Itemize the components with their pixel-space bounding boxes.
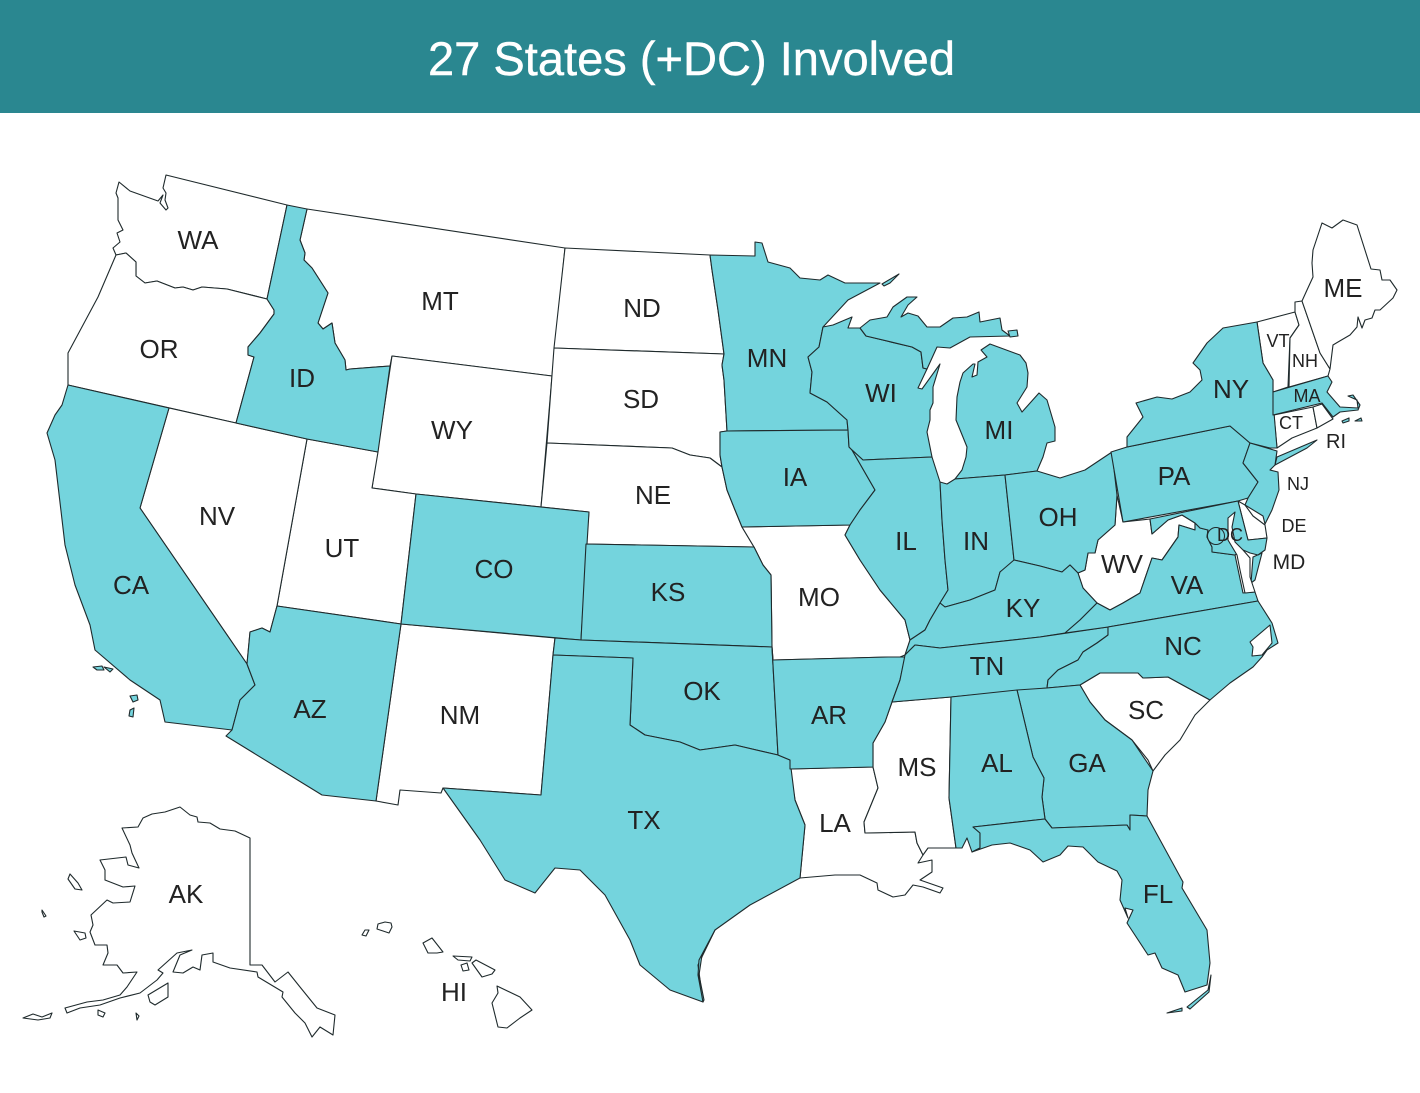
label LA: LA	[819, 808, 852, 838]
map: teal involved states	[47, 205, 1362, 1013]
label AR: AR	[811, 700, 847, 730]
label OK: OK	[683, 676, 721, 706]
label NV: NV	[199, 501, 236, 531]
state: Rhode Island	[1313, 404, 1333, 428]
label AZ: AZ	[293, 694, 327, 724]
state: Hawaii	[362, 922, 532, 1028]
state: Alabama	[949, 690, 1045, 852]
label WI: WI	[865, 378, 897, 408]
Pamlico Sound	[1250, 625, 1272, 656]
label NH: NH	[1292, 351, 1318, 371]
header banner	[0, 0, 1420, 113]
label NE: NE	[635, 480, 671, 510]
state: North Dakota	[554, 248, 724, 354]
label NM: NM	[440, 700, 480, 730]
label UT: UT	[325, 533, 359, 563]
state: Massachusetts	[1273, 376, 1360, 417]
map: white states	[23, 175, 1397, 1037]
state: Nevada	[140, 408, 307, 664]
label IA: IA	[783, 462, 808, 492]
state: Utah	[277, 439, 416, 624]
label ND: ND	[623, 293, 661, 323]
state: Mississippi	[864, 697, 956, 855]
state: Tennessee	[892, 627, 1108, 702]
label SC: SC	[1128, 695, 1164, 725]
California islands	[93, 666, 138, 717]
Massachusetts islands	[1342, 418, 1362, 423]
state: Maryland	[1150, 501, 1267, 555]
label ID: ID	[289, 363, 315, 393]
state: Kentucky	[905, 560, 1097, 655]
state: Maine	[1302, 220, 1397, 369]
label FL: FL	[1143, 879, 1173, 909]
state: Indiana	[940, 475, 1014, 607]
label MT: MT	[421, 286, 459, 316]
label GA: GA	[1068, 748, 1106, 778]
state: Ohio	[1005, 452, 1117, 573]
state: Colorado	[401, 494, 589, 640]
state: Nebraska	[541, 443, 754, 547]
Chesapeake Bay	[1228, 512, 1255, 593]
state: Oregon	[68, 253, 274, 423]
label KS: KS	[651, 577, 685, 607]
state: Georgia	[1017, 685, 1153, 830]
label NC: NC	[1164, 631, 1202, 661]
label MO: MO	[798, 582, 840, 612]
label DC: DC	[1217, 525, 1243, 545]
label PA: PA	[1158, 461, 1191, 491]
label RI: RI	[1326, 431, 1346, 453]
label IL: IL	[895, 526, 917, 556]
state: Texas	[443, 655, 805, 1002]
label AK: AK	[169, 879, 204, 909]
label OH: OH	[1038, 502, 1078, 532]
state: Iowa	[720, 430, 875, 527]
label MD: MD	[1273, 551, 1305, 574]
label DE: DE	[1281, 516, 1307, 536]
state: Florida	[972, 815, 1210, 992]
label MS: MS	[898, 752, 936, 782]
label NJ: NJ	[1287, 474, 1309, 494]
label WY: WY	[431, 415, 473, 445]
state: Wisconsin	[808, 317, 940, 460]
state: North Carolina	[1047, 601, 1278, 700]
Padre Island	[698, 930, 715, 1002]
state: Oklahoma	[553, 638, 778, 755]
label HI: HI	[441, 977, 467, 1007]
label IN: IN	[963, 526, 989, 556]
state: Connecticut	[1274, 407, 1317, 448]
state: Louisiana	[790, 767, 943, 897]
state: Minnesota	[710, 242, 880, 431]
label WA: WA	[178, 225, 219, 255]
label VA: VA	[1171, 570, 1204, 600]
label CA: CA	[113, 570, 150, 600]
label CT: CT	[1279, 413, 1303, 433]
label CO: CO	[474, 554, 514, 584]
Isle Royale	[882, 274, 899, 286]
state: Pennsylvania	[1111, 426, 1258, 522]
Michigan small island	[1008, 330, 1018, 337]
state: Kansas	[581, 544, 772, 647]
Long Island	[1275, 440, 1317, 465]
state: California	[47, 385, 255, 730]
state: Idaho	[236, 205, 390, 452]
state: Wyoming	[372, 356, 552, 507]
state: Washington	[113, 175, 287, 299]
state: Delaware	[1238, 501, 1267, 540]
label VT: VT	[1266, 331, 1290, 351]
state: Michigan lower peninsula	[955, 344, 1055, 479]
state: Illinois	[845, 450, 948, 640]
state: Montana	[300, 209, 565, 376]
state: Missouri	[742, 525, 910, 660]
District of Columbia	[1208, 528, 1224, 544]
state: Virginia	[1065, 523, 1258, 633]
label AL: AL	[981, 748, 1013, 778]
state: Arkansas	[772, 647, 905, 769]
Virginia eastern shore	[1251, 553, 1262, 583]
label ME: ME	[1324, 273, 1362, 303]
label TN: TN	[970, 651, 1004, 681]
label SD: SD	[623, 384, 659, 414]
state labels	[113, 225, 1362, 1007]
state: Vermont	[1257, 312, 1299, 392]
state: New Jersey	[1243, 443, 1279, 524]
state: New York	[1127, 322, 1277, 448]
state: Michigan upper peninsula	[860, 297, 1010, 369]
label OR: OR	[140, 334, 178, 364]
label TX: TX	[627, 805, 661, 835]
state: South Carolina	[1080, 673, 1210, 771]
state: West Virginia	[1078, 495, 1195, 610]
Florida Keys	[1167, 975, 1211, 1013]
state: Alaska	[23, 807, 335, 1037]
label MA: MA	[1294, 386, 1320, 406]
label WV: WV	[1101, 549, 1144, 579]
state: New Hampshire	[1289, 301, 1330, 387]
label MN: MN	[747, 343, 787, 373]
title: 27 States (+DC) Involved	[428, 32, 955, 85]
label NY: NY	[1213, 374, 1249, 404]
state: Arizona	[226, 606, 401, 801]
state: South Dakota	[547, 348, 727, 467]
label KY: KY	[1006, 593, 1040, 623]
state: New Mexico	[376, 624, 555, 805]
label MI: MI	[985, 415, 1013, 445]
